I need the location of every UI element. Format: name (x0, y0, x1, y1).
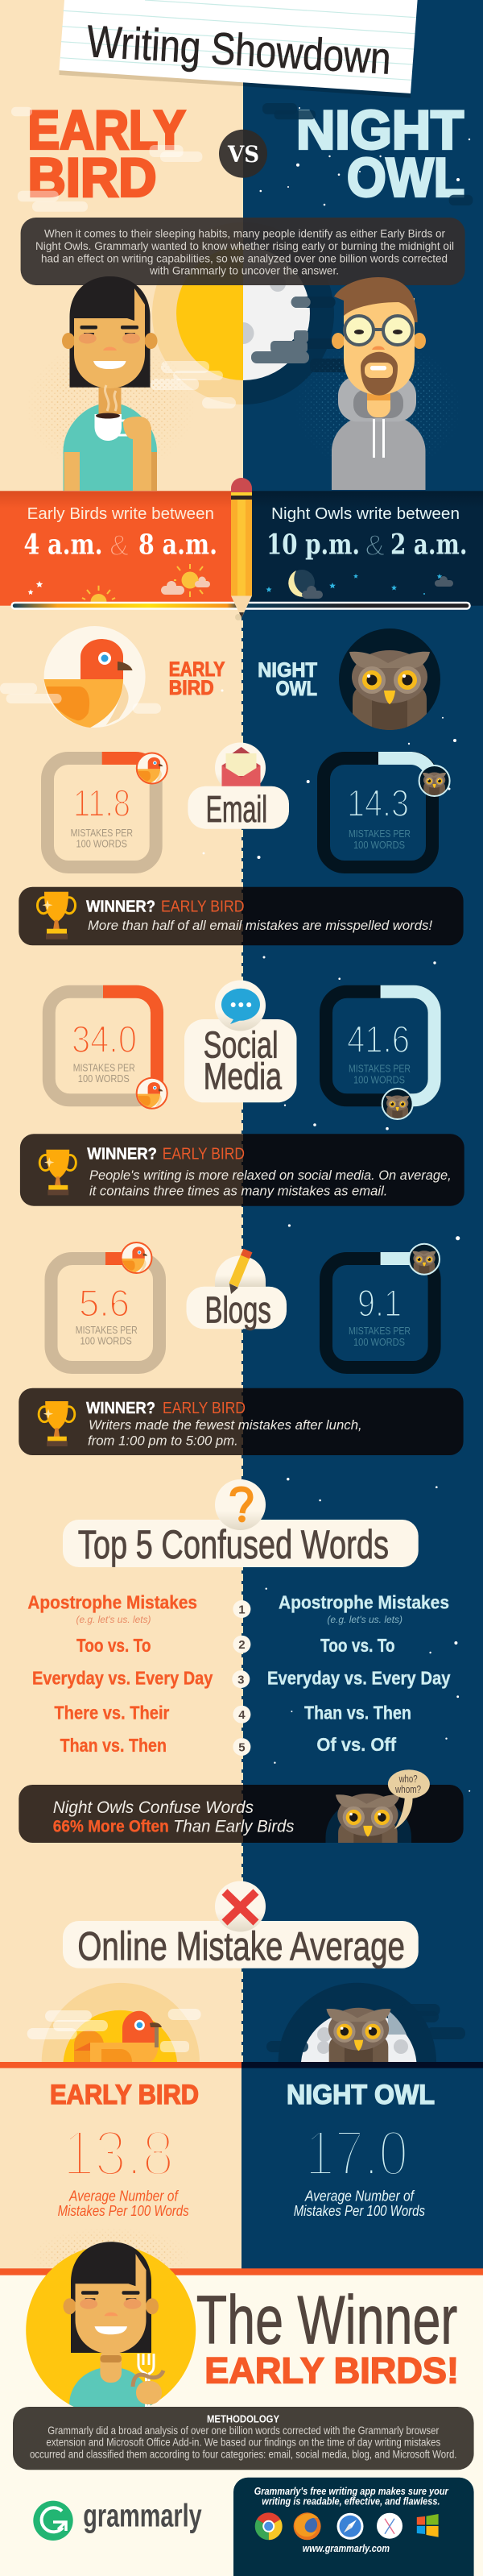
icon: speech bubble (215, 980, 266, 1031)
hand (136, 2381, 162, 2404)
heading: night owl: NIGHT (296, 100, 464, 161)
face (344, 298, 415, 395)
callout: night owls confuse words (19, 1769, 464, 1843)
confused words: early birds list: There vs. Their (54, 1702, 169, 1723)
icon: question mark (215, 1479, 266, 1530)
glasses (345, 316, 374, 345)
character: night owl man in hoodie (332, 277, 426, 490)
rank numbers: 4 (238, 1708, 246, 1722)
confused words: early birds list: (e.g. let's us. lets) (76, 1614, 151, 1625)
social: early bird score ring (49, 992, 167, 1109)
badge (419, 765, 450, 796)
winner callout: social media: WINNER? (87, 1145, 157, 1163)
text (204, 1024, 282, 1097)
unit: MISTAKES PER (73, 1062, 135, 1073)
sun halo (152, 222, 243, 404)
call to action panel: writing is readable, effective, and flawless. (262, 2495, 440, 2508)
blogs: night owl score ring (326, 1244, 440, 1367)
footer top bar (0, 2268, 483, 2275)
ears (332, 333, 345, 349)
icon: trophy (39, 1150, 76, 1195)
winner callout: email (19, 887, 464, 945)
average: early bird column: Average Number of (68, 2188, 180, 2205)
blogs: early bird score ring (52, 1242, 159, 1367)
winner callout: email: WINNER? (86, 898, 155, 916)
winner callout: social media: it contains three times as many mistakes as email. (89, 1183, 387, 1198)
label (187, 1287, 287, 1329)
badge (382, 1089, 413, 1119)
beak and worm (150, 2022, 162, 2027)
text: Social (204, 1024, 279, 1066)
unit: MISTAKES PER (349, 1064, 411, 1075)
unit (76, 1325, 138, 1347)
winner callout: social media (20, 1134, 464, 1206)
icon: trophy (39, 1401, 75, 1446)
intro text box: with Grammarly to uncover the answer. (149, 263, 339, 276)
intro text box: When it comes to their sleeping habits, many people identify as either Early Birds or (44, 227, 445, 240)
confused words: night owls list: (e.g. let's us. lets) (327, 1614, 402, 1625)
badge (137, 1078, 167, 1109)
score: 5.6 (79, 1281, 130, 1324)
callout: night owls confuse words: 66% More Often (53, 1817, 169, 1836)
shirt (69, 2368, 153, 2407)
icon: os x (377, 2513, 402, 2539)
label (258, 659, 317, 700)
icon: sun behind clouds (161, 564, 210, 597)
versus badge (219, 130, 267, 178)
methodology box (13, 2407, 474, 2470)
call to action panel (233, 2478, 474, 2576)
score: 9.1 (357, 1281, 402, 1324)
paper (60, 0, 418, 93)
icon: firefox (294, 2512, 321, 2540)
label: EARLY (169, 658, 225, 681)
time band: night owls: 10 p.m. (266, 528, 360, 561)
strings (373, 419, 375, 458)
intro text box (21, 218, 465, 285)
average: night owl column: Mistakes Per 100 Words (294, 2203, 425, 2219)
stipple above winner portrait (37, 2230, 185, 2267)
neck (367, 391, 390, 417)
section header: night owl badge (258, 628, 440, 730)
sun and moon (151, 222, 350, 409)
night clouds (291, 297, 350, 372)
arms (64, 452, 80, 491)
unit: MISTAKES PER (76, 1325, 138, 1336)
label (184, 1019, 296, 1102)
title card (60, 0, 418, 98)
average: early bird column (50, 2080, 199, 2219)
grammarly logo: grammarly (83, 2498, 202, 2533)
shirt (63, 403, 157, 491)
text: Email (206, 788, 267, 830)
average: early bird column: Mistakes Per 100 Words (58, 2203, 189, 2219)
icon: blue stars (266, 574, 442, 595)
head (122, 2011, 157, 2043)
stipple behind man (299, 351, 456, 456)
hoodie body (332, 413, 425, 490)
icon: chrome (255, 2512, 283, 2540)
icon: rising sun (82, 586, 115, 602)
winner callout: social media: EARLY BIRD (163, 1145, 245, 1163)
winner callout: social media: People's writing is more relaxed on social media. On average, (89, 1168, 452, 1183)
confused words: night owls list: Too vs. To (320, 1635, 395, 1656)
time band: night owls: & (365, 529, 385, 562)
clouds (0, 683, 161, 714)
unit (349, 828, 411, 851)
rank numbers: 1 (238, 1603, 246, 1616)
hair (334, 277, 418, 322)
icon: safari (336, 2513, 364, 2540)
icon: trophy (37, 892, 76, 940)
social: night owl score ring (326, 992, 435, 1119)
label (63, 1520, 419, 1567)
unit: 100 WORDS (78, 1073, 130, 1085)
clouds over headings (11, 103, 473, 212)
stars mid page (203, 690, 470, 1792)
moon halo (243, 222, 334, 404)
rank numbers: 2 (238, 1638, 246, 1652)
background: lower navy side (242, 606, 483, 2274)
callout: night owls confuse words: Than Early Birds (173, 1817, 295, 1836)
icon: owl (339, 628, 440, 730)
time band: early birds (0, 491, 242, 606)
dashed centre line (242, 620, 243, 2062)
time band: early birds: & (109, 529, 129, 562)
badge (121, 1242, 151, 1273)
text: Media (204, 1056, 282, 1097)
background: early bird cream side (0, 0, 243, 606)
winner callout: blogs: EARLY BIRD (163, 1400, 246, 1417)
neck (98, 379, 121, 419)
heading: early bird: EARLY (27, 100, 185, 161)
label (188, 786, 289, 829)
top 5 heading (63, 1479, 419, 1567)
confused words: early birds list: Than vs. Then (60, 1735, 167, 1756)
confused words: early birds list: Apostrophe Mistakes (27, 1592, 197, 1613)
wing (74, 2031, 104, 2062)
scene: bird at sunrise (27, 1983, 201, 2062)
icon: stars (28, 581, 43, 595)
unit (349, 1325, 411, 1348)
heading: night owl (296, 100, 464, 208)
methodology box: METHODOLOGY (207, 2412, 279, 2425)
winner callout: blogs: Writers made the fewest mistakes after lunch, (89, 1417, 362, 1433)
moon (243, 247, 310, 380)
unit (71, 828, 133, 850)
intro text box: had an effect on writing capabilities, so we analyzed over one billion words corrected (41, 251, 448, 264)
badge (137, 753, 167, 783)
timeline bar (12, 603, 470, 609)
score: 34.0 (72, 1018, 137, 1060)
morning clouds (151, 361, 236, 409)
stipple behind woman (32, 353, 188, 458)
confused words: night owls list: Of vs. Off (316, 1734, 396, 1755)
heading: early bird: BIRD (27, 147, 156, 208)
label: OWL (275, 678, 317, 700)
label: BIRD (169, 677, 214, 699)
email heading (188, 743, 289, 830)
title text: Writing Showdown (85, 15, 392, 84)
stars upper right (259, 107, 470, 205)
clouds (27, 2009, 201, 2052)
call to action panel: Grammarly's free writing app makes sure your (254, 2485, 449, 2497)
winner callout: email: More than half of all email mistakes are misspelled words! (88, 918, 432, 933)
background: night owl navy side (243, 0, 483, 606)
body (90, 2043, 159, 2062)
time band: early birds: 4 a.m. (24, 528, 103, 561)
label (63, 1921, 419, 1968)
steam (105, 385, 116, 411)
label (169, 658, 225, 699)
average: early bird column: 13.8 (63, 2117, 174, 2188)
icon: owl with speech bubble (325, 1794, 411, 1843)
icon: bird (44, 626, 146, 728)
rank numbers: 3 (237, 1673, 244, 1687)
beard (361, 352, 398, 396)
email: night owl score ring (324, 758, 450, 867)
section header: early bird badge (0, 626, 225, 728)
grammarly logo (33, 2498, 202, 2541)
winner callout: email: EARLY BIRD (161, 898, 245, 916)
time band: night owls (242, 491, 483, 606)
unit: 100 WORDS (76, 839, 127, 850)
text: Top 5 Confused Words (78, 1522, 389, 1567)
winner portrait (26, 2242, 196, 2417)
social media heading (184, 980, 296, 1102)
icon: red cross (215, 1881, 266, 1932)
icon: small cloud (435, 576, 453, 587)
unit: 100 WORDS (353, 840, 405, 851)
winner heading: EARLY BIRDS! (204, 2350, 459, 2391)
average: night owl column: 17.0 (305, 2117, 408, 2188)
score: 11.8 (73, 782, 130, 824)
icon: crescent moon with cloud (288, 570, 323, 599)
average: early bird column: EARLY BIRD (50, 2080, 199, 2110)
sun (176, 247, 243, 380)
confused words: night owls list (267, 1592, 451, 1755)
paper shadow (60, 70, 243, 86)
confused words: early birds list: Too vs. To (76, 1635, 151, 1656)
unit: MISTAKES PER (71, 828, 133, 839)
score: 14.3 (347, 782, 409, 824)
pencil (231, 478, 252, 620)
rank numbers: 5 (238, 1740, 246, 1755)
fork and worm (138, 2354, 154, 2407)
confused words: early birds list (27, 1592, 213, 1756)
unit (349, 1064, 411, 1085)
winner heading (196, 2283, 459, 2391)
unit: 100 WORDS (353, 1337, 405, 1348)
badge (409, 1244, 440, 1275)
blogs heading (187, 1251, 287, 1331)
coffee cup (95, 414, 122, 441)
average: night owl column: Average Number of (304, 2188, 415, 2205)
time band: early birds: Early Birds write between (27, 505, 214, 523)
icon: envelope (215, 743, 266, 793)
unit: 100 WORDS (353, 1074, 405, 1085)
label: NIGHT (258, 659, 317, 682)
hand (123, 417, 151, 439)
time band: night owls: Night Owls write between (271, 505, 460, 523)
unit (73, 1062, 135, 1085)
heading: early bird (27, 100, 185, 208)
nose (372, 346, 385, 350)
hood (338, 376, 416, 421)
background: lower cream side (0, 606, 242, 2274)
online mistake average heading (63, 1881, 419, 1968)
character: early bird woman with coffee (62, 276, 158, 491)
neck (100, 2349, 122, 2383)
average: night owl column: NIGHT OWL (287, 2080, 435, 2110)
versus badge: VS (227, 141, 259, 168)
winner callout: blogs: from 1:00 pm to 5:00 pm. (88, 1433, 238, 1448)
footer background (0, 2269, 483, 2576)
icon: windows (417, 2514, 439, 2537)
scene: owl at moonrise (266, 1982, 465, 2062)
head (63, 2242, 159, 2354)
confused words: early birds list: Everyday vs. Every Day (32, 1668, 213, 1689)
speech bubble: whom? (394, 1784, 421, 1795)
unit: MISTAKES PER (349, 828, 411, 840)
score: 41.6 (347, 1018, 410, 1060)
winner callout: blogs (19, 1388, 464, 1455)
speech bubble: who? (398, 1773, 418, 1785)
confused words: night owls list: Everyday vs. Every Day (267, 1668, 451, 1689)
head (62, 276, 158, 388)
confused words: night owls list: Apostrophe Mistakes (279, 1592, 449, 1613)
intro text box: Night Owls. Grammarly wanted to know whether rising early or burning the midnight oil (35, 239, 454, 252)
average: night owl column (287, 2080, 435, 2219)
confused words: night owls list: Than vs. Then (304, 1702, 411, 1723)
rank numbers (232, 1600, 250, 1756)
call to action panel: www.grammarly.com (303, 2542, 390, 2554)
text: Blogs (204, 1289, 271, 1331)
unit: 100 WORDS (80, 1336, 132, 1347)
time band: early birds: 8 a.m. (138, 528, 217, 561)
heading: night owl: OWL (347, 147, 464, 208)
unit: MISTAKES PER (349, 1325, 411, 1337)
horizon bar (0, 2062, 483, 2068)
speech bubble (388, 1769, 430, 1829)
email: early bird score ring (47, 753, 167, 867)
callout: night owls confuse words: Night Owls Confuse Words (53, 1798, 254, 1817)
icon: pencil (215, 1251, 266, 1294)
winner callout: blogs: WINNER? (86, 1400, 155, 1417)
